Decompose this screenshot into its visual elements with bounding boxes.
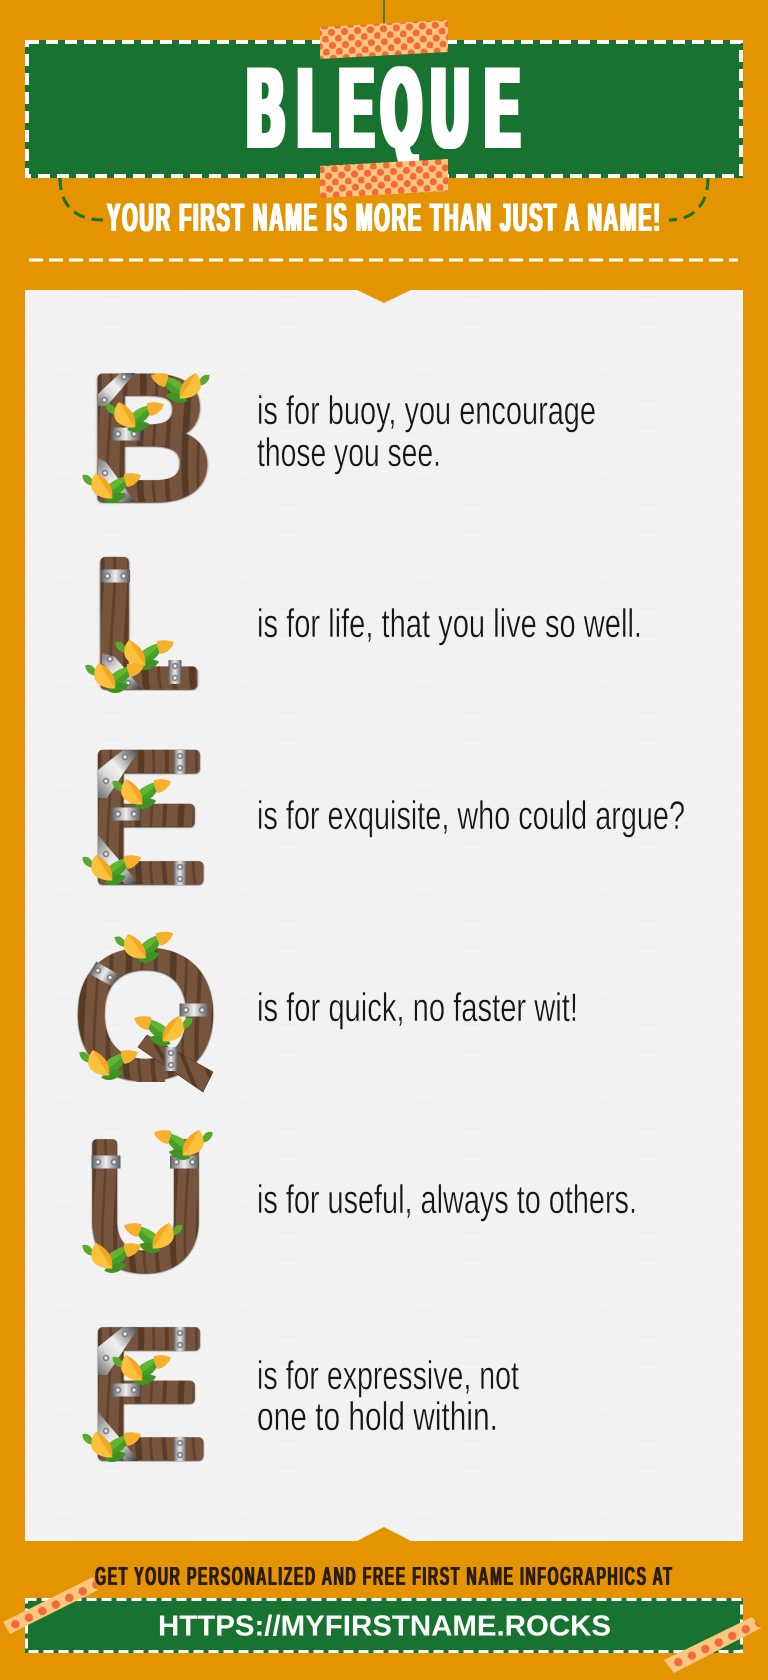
tape: footer left (3, 1577, 98, 1634)
tape: footer right (664, 1617, 761, 1673)
footer url banner (25, 1598, 743, 1653)
tape: bottom (320, 159, 448, 198)
left dashed curve (60, 178, 103, 220)
title banner (25, 40, 743, 178)
text: second E lines: is for expressive, not (257, 1354, 519, 1398)
tape: top (320, 20, 448, 59)
title: BLEQUE (247, 46, 519, 171)
letter Q illustration: Q (74, 917, 217, 1113)
right dashed curve (669, 178, 708, 220)
subtitle: YOUR FIRST NAME IS MORE THAN JUST A NAME! (107, 194, 660, 240)
text: Q line: is for quick, no faster wit! (257, 986, 578, 1030)
letter E illustration: E (88, 716, 207, 919)
letter L illustration: L (89, 523, 199, 723)
letter B illustration: B (87, 341, 212, 535)
dashed divider (29, 258, 738, 262)
top hanging line (383, 0, 385, 24)
footer call to action: GET YOUR PERSONALIZED AND FREE FIRST NAME INFOGRAPHICS AT (95, 1563, 672, 1591)
text: B line (257, 389, 596, 475)
letter U illustration: U (83, 1106, 208, 1305)
text: second E lines: one to hold within. (257, 1395, 498, 1439)
text: second E lines (257, 1354, 519, 1439)
footer url banner: HTTPS://MYFIRSTNAME.ROCKS (158, 1610, 611, 1642)
second letter E illustration: E (88, 1293, 207, 1494)
text: B line: is for buoy, you encourage (257, 389, 596, 433)
text: B line: those you see. (257, 431, 441, 475)
panel: letters (25, 290, 743, 1541)
